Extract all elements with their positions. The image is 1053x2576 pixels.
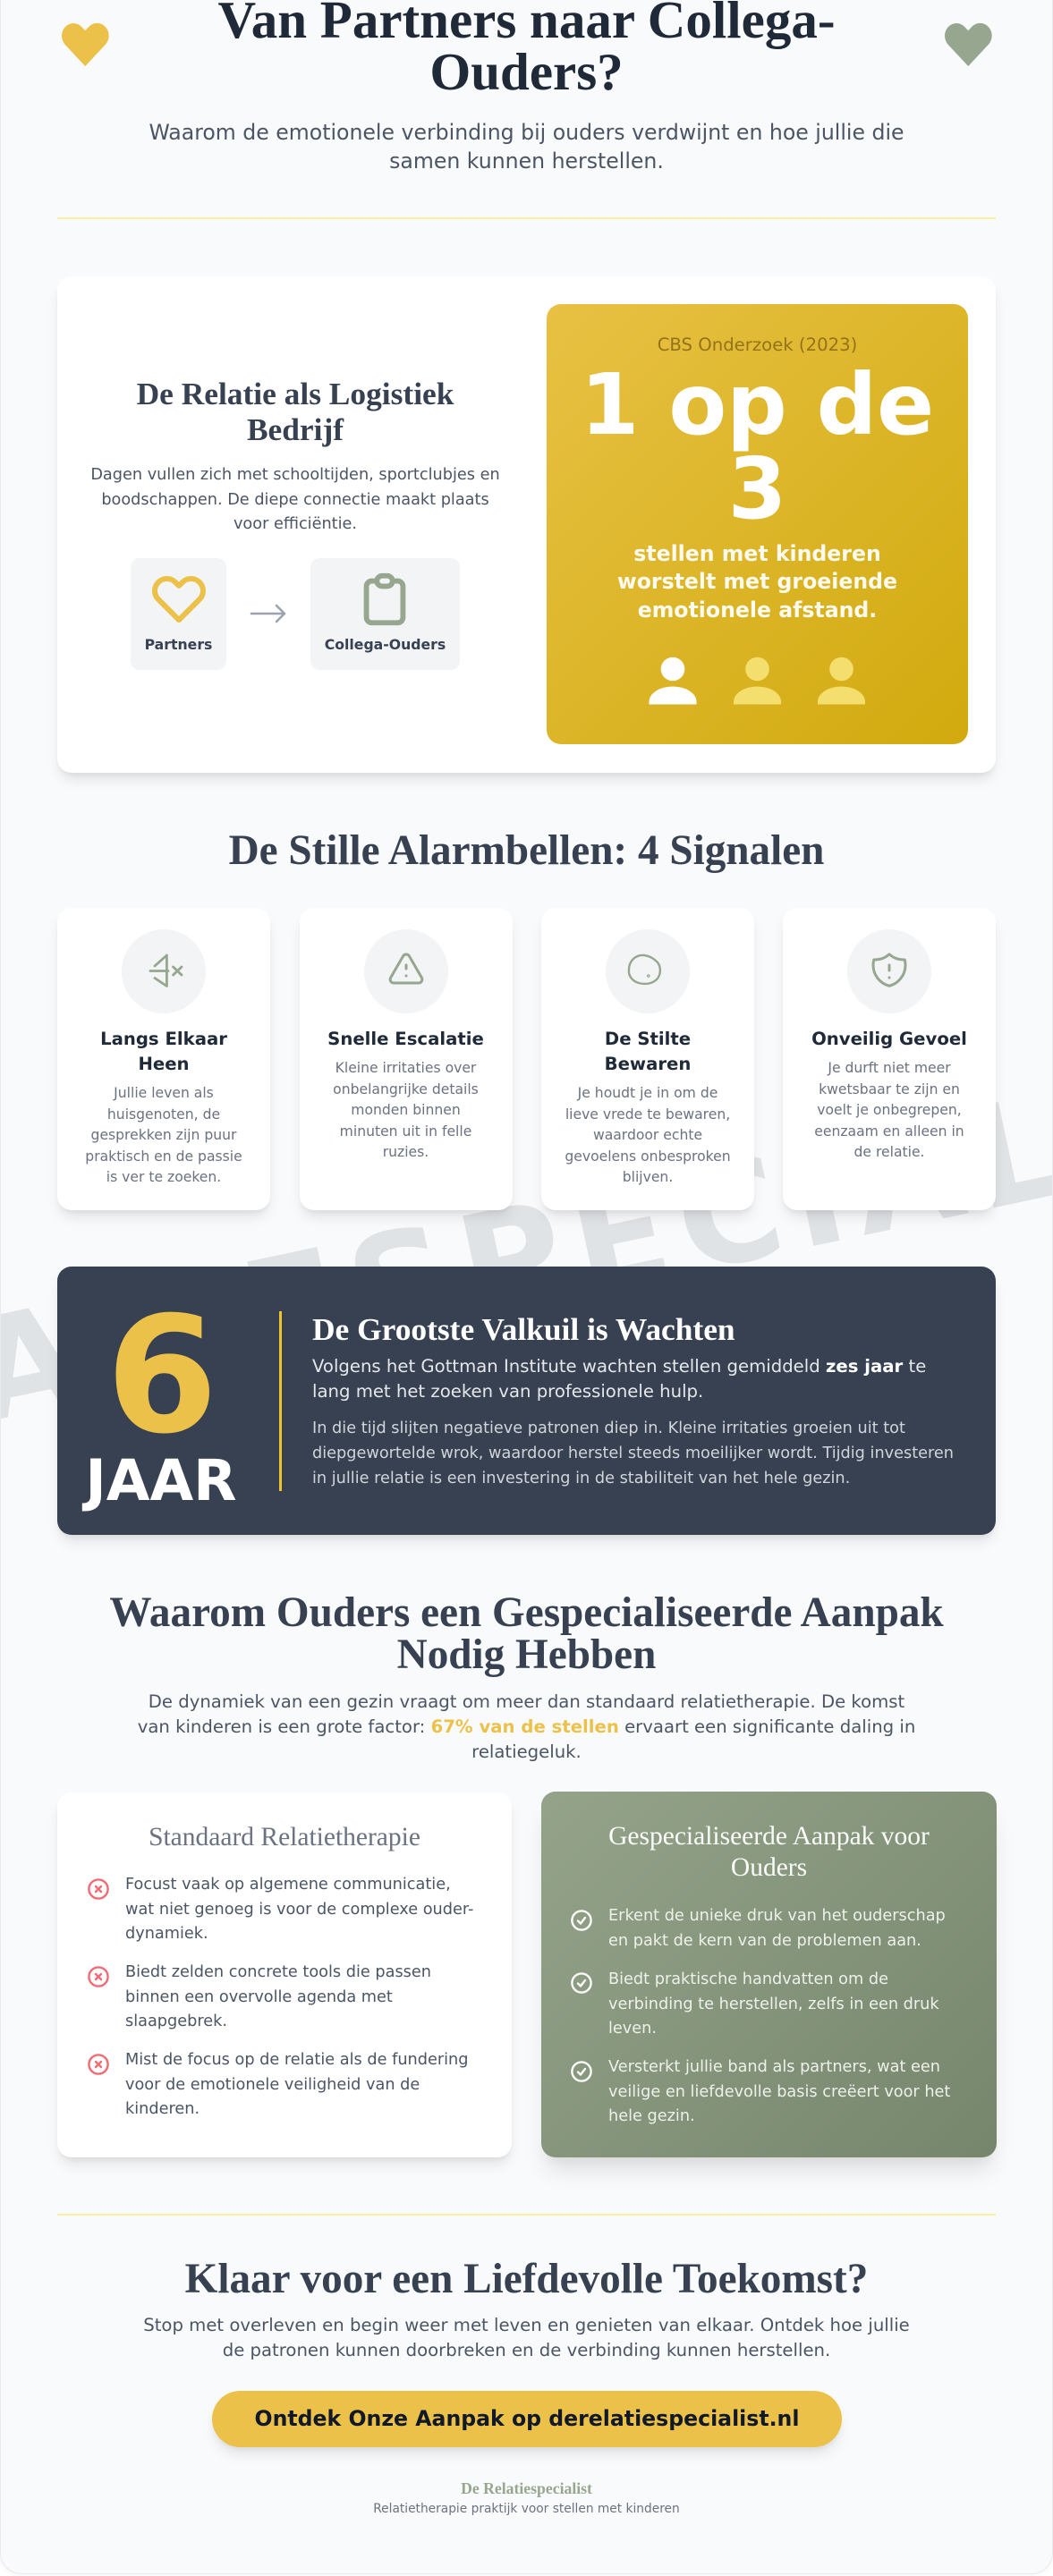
heading (608, 1822, 930, 1882)
label: collega-ouders: Collega-Ouders (325, 636, 446, 653)
text: minuten uit in felle (340, 1123, 471, 1140)
text: gevoelens onbesproken (565, 1148, 731, 1165)
text: call to action (0, 2313, 1053, 2363)
text: dynamiek intro: van kinderen is een grote factor: 67% van de stellen ervaart een significante daling in (138, 1716, 915, 1737)
text: huisgenoten, de (107, 1106, 220, 1123)
text (125, 1963, 431, 2030)
heading: call to action: Klaar voor een Liefdevolle Toekomst? (185, 2256, 868, 2302)
text: en pakt de kern van de problemen aan. (608, 1932, 921, 1950)
text: gottman (312, 1356, 926, 1402)
item 2 (571, 1970, 939, 2038)
title: Bewaren (605, 1054, 691, 1073)
text: binnen een overvolle agenda met (125, 1987, 393, 2005)
text: dynamiek intro: relatiegeluk. (471, 1741, 582, 1762)
text: wat niet genoeg is voor de complexe ouder- (125, 1900, 473, 1918)
text: kwetsbaar te zijn en (819, 1081, 960, 1097)
footer tagline: Relatietherapie praktijk voor stellen met kinderen (373, 2502, 680, 2516)
text: statistic description: stellen met kinderen (633, 541, 881, 566)
footer brand: De Relatiespecialist (461, 2479, 592, 2497)
icon: check circle (571, 2061, 592, 2082)
text: negatieve patronen: In die tijd slijten negatieve patronen diep in. Kleine irritaties groeien uit tot (312, 1419, 905, 1437)
heading: gespecialiseerde aanpak: Nodig Hebben (397, 1631, 656, 1678)
text: dynamiek intro (138, 1691, 915, 1762)
text: Kleine irritaties over (335, 1060, 476, 1076)
heading: 4 signalen: De Stille Alarmbellen: 4 Signalen (229, 827, 824, 874)
text: Mist de focus op de relatie als de fundering (125, 2051, 468, 2069)
card: onveilig gevoel (783, 908, 996, 1210)
text: negatieve patronen (312, 1419, 954, 1487)
panel: statistic (547, 304, 968, 744)
text: gottman: lang met het zoeken van professionele hulp. (312, 1381, 703, 1402)
icon: x circle (88, 2054, 109, 2075)
text (608, 1970, 939, 2038)
text (608, 1907, 946, 1950)
text: statistic description: emotionele afstand. (638, 597, 877, 623)
card: de stilte bewaren (541, 908, 754, 1210)
text: Biedt zelden concrete tools die passen (125, 1963, 431, 1981)
text: call to action: Stop met overleven en begin weer met leven en genieten van elkaar. Ontdek hoe jullie (143, 2315, 910, 2335)
text (125, 1876, 473, 1943)
box: collega-ouders (310, 558, 460, 670)
text (125, 2051, 468, 2118)
text: relatie intro: boodschappen. De diepe connectie maakt plaats (101, 491, 489, 509)
heading: gespecialiseerde aanpak (109, 1589, 944, 1678)
heading: Ouders (731, 1853, 807, 1882)
button: ontdek (212, 2391, 842, 2447)
text: statistic description (617, 541, 897, 623)
icon: clipboard (363, 572, 406, 626)
text: de relatie. (853, 1144, 925, 1160)
text: dynamiek. (125, 1925, 208, 1943)
button label: Ontdek Onze Aanpak op derelatiespecialist.nl (255, 2406, 799, 2431)
icon: check circle (571, 1972, 592, 1994)
icon: silent bubble (606, 929, 690, 1013)
text: veilige en liefdevolle basis creëert voor het (608, 2082, 950, 2100)
text: Jullie leven als (114, 1085, 214, 1101)
text: Je houdt je in om de (578, 1085, 718, 1101)
text: onbelangrijke details (333, 1081, 479, 1097)
heading: gespecialiseerde aanpak: Waarom Ouders een Gespecialiseerde Aanpak (109, 1589, 944, 1636)
text: kinderen. (125, 2100, 200, 2118)
text: statistic description: worstelt met groeiende (617, 569, 897, 594)
subtitle (149, 120, 904, 174)
text: verbinding te herstellen, zelfs in een druk (608, 1995, 939, 2012)
text: call to action: de patronen kunnen doorbreken en de verbinding kunnen herstellen. (223, 2340, 830, 2360)
text: voor de emotionele veiligheid van de (125, 2075, 420, 2093)
text (565, 1085, 731, 1185)
title: Ouders? (429, 42, 624, 101)
text: is ver te zoeken. (106, 1169, 221, 1185)
text: Versterkt jullie band als partners, wat een (608, 2058, 940, 2076)
text: negatieve patronen: diepgewortelde wrok, waardoor herstel steeds moeilijker wordt. Tijdig investeren (312, 1445, 954, 1462)
text: ruzies. (383, 1144, 429, 1160)
text: dynamiek intro: De dynamiek van een gezin vraagt om meer dan standaard relatietherapie. De komst (149, 1691, 904, 1712)
title: Langs Elkaar (100, 1029, 227, 1049)
panel: 6 jaar valkuil (57, 1267, 996, 1535)
text: source: CBS Onderzoek (2023) (658, 335, 857, 355)
card: langs elkaar heen (57, 908, 270, 1210)
icon: sage heart (945, 23, 992, 66)
text (814, 1060, 964, 1160)
title (100, 1029, 227, 1073)
title: De Stilte (605, 1029, 691, 1049)
text: monden binnen (351, 1102, 461, 1118)
icon: persons (650, 657, 865, 705)
title: Heen (138, 1054, 190, 1073)
panel: standaard relatietherapie (57, 1792, 512, 2157)
label: partners: Partners (145, 636, 212, 653)
heading: relatie als logistiek bedrijf: Bedrijf (247, 411, 344, 447)
text: slaapgebrek. (125, 2012, 227, 2030)
subtitle: samen kunnen herstellen. (389, 148, 664, 174)
text: Erkent de unieke druk van het ouderschap (608, 1907, 946, 1925)
subtitle: Waarom de emotionele verbinding bij ouders verdwijnt en hoe jullie die (149, 120, 904, 145)
heading: grootste valkuil: De Grootste Valkuil is Wachten (312, 1311, 735, 1347)
big number: 6: 6 (106, 1283, 218, 1470)
text: lieve vrede te bewaren, (565, 1106, 730, 1123)
panel: logistiek bedrijf (57, 276, 996, 773)
text: relatie intro: voor efficiëntie. (234, 515, 357, 533)
text (85, 1085, 242, 1185)
icon: yellow heart (62, 23, 109, 66)
icon: circle with arrows (122, 929, 206, 1013)
item 2 (88, 1963, 431, 2030)
text (608, 2055, 950, 2129)
accent line (279, 1311, 282, 1491)
text: waardoor echte (593, 1127, 702, 1143)
panel: gespecialiseerde aanpak (541, 1792, 997, 2157)
big number: 1 op de 3: 3 (728, 440, 786, 538)
text: relatie intro: Dagen vullen zich met schooltijden, sportclubjes en (90, 466, 500, 484)
title: Snelle Escalatie (327, 1029, 484, 1049)
text: Je durft niet meer (828, 1060, 951, 1076)
text: Biedt praktische handvatten om de (608, 1970, 888, 1988)
title (218, 0, 835, 101)
arrow (251, 605, 286, 623)
text (333, 1060, 479, 1160)
box: partners (131, 558, 226, 670)
icon: heart outline (152, 576, 206, 623)
heading: Gespecialiseerde Aanpak voor (608, 1822, 930, 1851)
text: eenzaam en alleen in (814, 1123, 964, 1140)
text: relatie intro (90, 466, 500, 533)
text: Focust vaak op algemene communicatie, (125, 1876, 451, 1894)
heading: relatie als logistiek bedrijf (137, 376, 454, 447)
text: praktisch en de passie (85, 1148, 242, 1165)
icon: warning triangle (363, 929, 447, 1013)
text: blijven. (623, 1169, 673, 1185)
item 3 (88, 2051, 468, 2118)
item 3 (571, 2058, 950, 2125)
icon: shield (847, 929, 931, 1013)
label: jaar: JAAR (85, 1448, 237, 1513)
text: negatieve patronen: in jullie relatie is een investering in de stabiliteit van het hele gezin. (312, 1470, 850, 1487)
text: hele gezin. (608, 2107, 695, 2125)
title: Onveilig Gevoel (811, 1029, 967, 1049)
icon: check circle (571, 1910, 592, 1931)
text: gesprekken zijn puur (91, 1127, 236, 1143)
heading: relatie als logistiek bedrijf: De Relatie als Logistiek (137, 376, 454, 411)
card: snelle escalatie (299, 908, 512, 1210)
item 1 (88, 1876, 473, 1943)
text: gottman: Volgens het Gottman Institute wachten stellen gemiddeld zes jaar te (312, 1356, 926, 1377)
icon: x circle (88, 1878, 109, 1900)
heading: Standaard Relatietherapie (149, 1823, 420, 1852)
big number: 1 op de 3: 1 op de (581, 356, 934, 454)
text: leven. (608, 2020, 657, 2038)
icon: x circle (88, 1966, 109, 1987)
big number: 1 op de 3 (581, 356, 934, 538)
title (605, 1029, 691, 1073)
item 1 (571, 1907, 946, 1950)
text: voelt je onbegrepen, (817, 1102, 962, 1118)
